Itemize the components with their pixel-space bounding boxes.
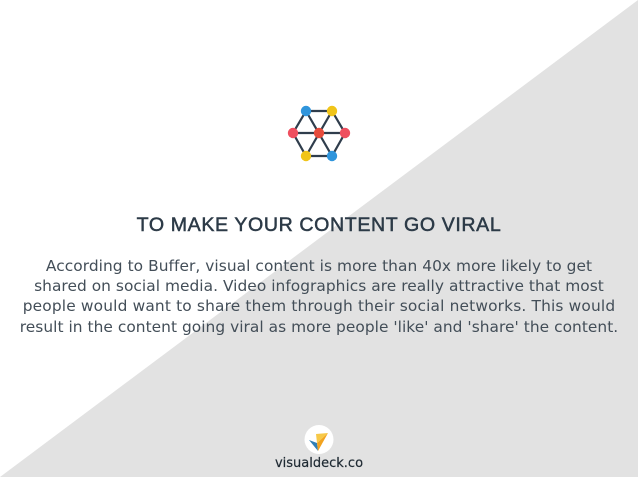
body text: shared on social media. Video infographics are really attractive that most <box>34 277 604 295</box>
logo: visualdeck.co <box>275 425 363 471</box>
body text <box>20 257 618 336</box>
body text: result in the content going viral as more people 'like' and 'share' the content. <box>20 318 618 336</box>
icon: network hexagon <box>288 106 350 162</box>
logo wordmark: visualdeck.co <box>275 456 363 471</box>
body text: According to Buffer, visual content is more than 40x more likely to get <box>46 257 592 275</box>
icon: logo mark <box>304 425 334 454</box>
body text: people would want to share them through their social networks. This would <box>23 297 615 315</box>
title: TO MAKE YOUR CONTENT GO VIRAL <box>137 214 501 236</box>
